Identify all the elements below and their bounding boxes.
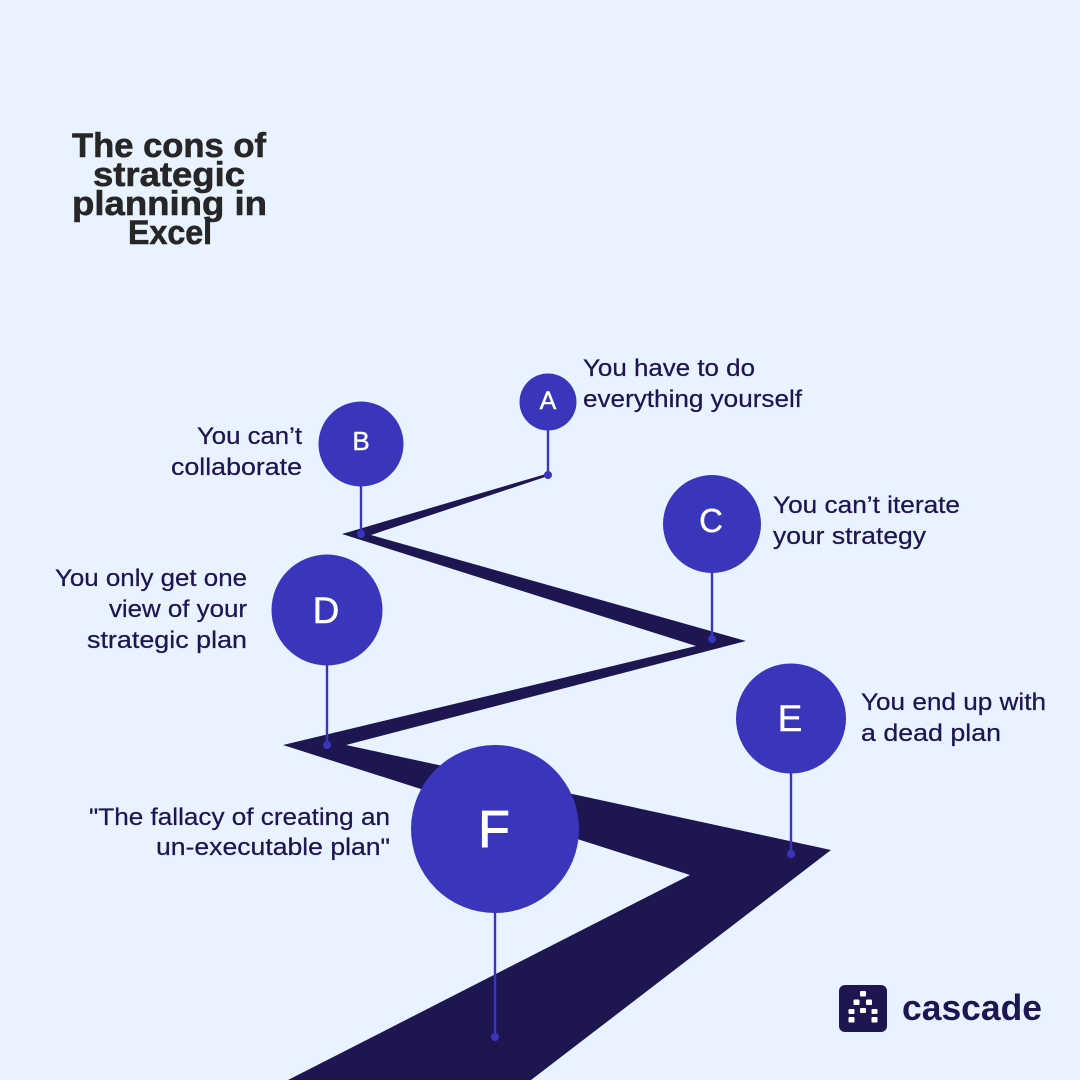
text: C [773,492,960,550]
text: D: strategic plan [87,627,247,654]
zigzag road [283,474,831,1080]
text: A: You have to do [583,355,755,382]
text: C: your strategy [773,523,926,550]
cascade logo [839,985,1042,1032]
title [72,127,267,252]
marker B: B [352,426,370,456]
text: F: "The fallacy of creating an [89,804,390,831]
text: D [55,565,247,654]
title: Excel [128,214,212,252]
text: E [861,689,1046,747]
icon: cascade mark [839,985,887,1032]
marker A [520,374,576,479]
text: B [171,423,302,481]
marker D [272,554,382,749]
text: D: You only get one [55,565,247,592]
text: E: You end up with [861,689,1046,716]
wordmark: cascade [902,987,1042,1028]
title: The cons of [72,127,267,165]
text: D: view of your [109,596,247,623]
marker F: F [478,801,510,859]
title: strategic [93,156,245,194]
title: planning in [72,185,267,223]
marker E: E [778,698,802,739]
marker B [318,402,404,538]
marker E [736,664,846,858]
text: B: collaborate [171,454,302,481]
marker F [411,745,579,1041]
marker C [663,475,761,643]
text: C: You can’t iterate [773,492,960,519]
text: F [89,804,390,861]
text: A: everything yourself [583,386,802,413]
text: A [583,355,802,413]
marker D: D [313,590,339,631]
text: F: un-executable plan" [156,834,390,861]
marker C: C [699,502,723,539]
marker A: A [540,387,557,415]
text: B: You can’t [197,423,302,450]
text: E: a dead plan [861,720,1001,747]
